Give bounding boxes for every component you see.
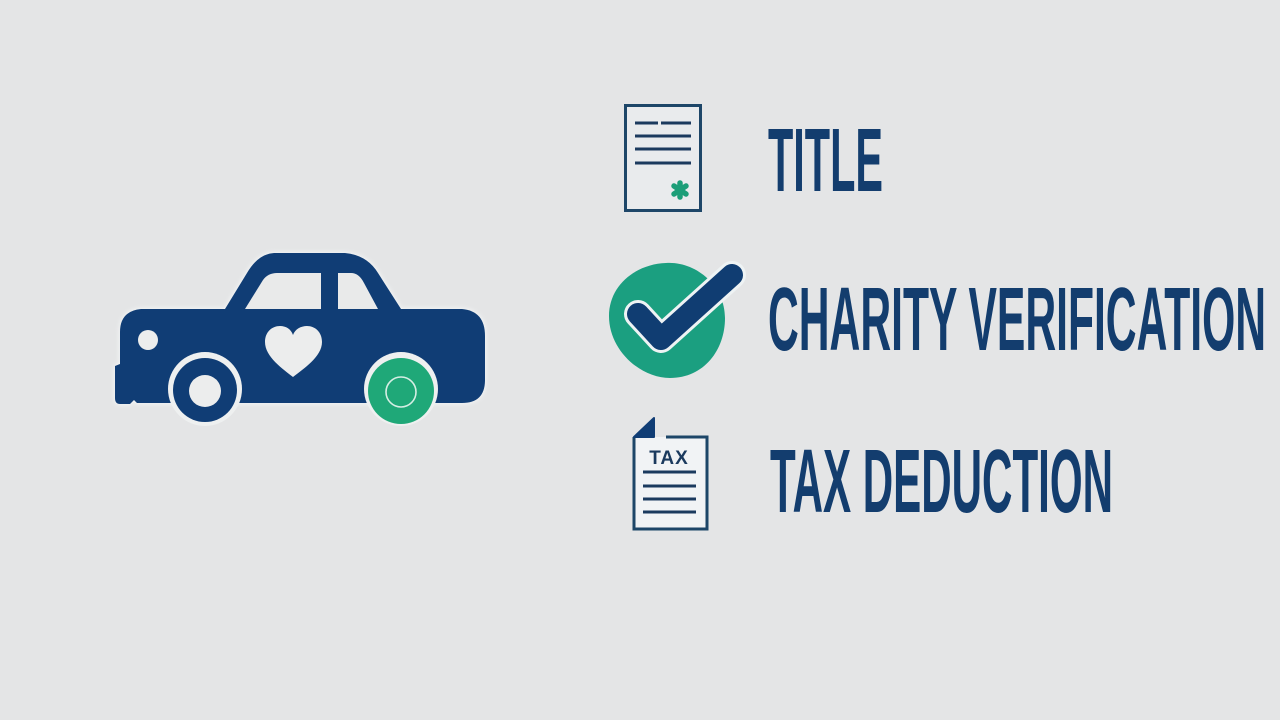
icon: car with heart xyxy=(115,253,485,426)
infographic canvas: TITLE xyxy=(768,111,883,211)
front wheel xyxy=(364,352,438,426)
car body xyxy=(115,253,485,404)
tax label: TAX xyxy=(649,448,689,469)
rear wheel xyxy=(168,352,242,426)
icon: tax document xyxy=(634,418,707,529)
green seal xyxy=(674,183,686,197)
icon: title document xyxy=(626,106,700,210)
icon: verification check badge xyxy=(609,263,732,378)
headlight xyxy=(138,330,158,350)
tax lines xyxy=(643,472,696,512)
heart xyxy=(265,326,322,377)
folded corner xyxy=(634,418,654,437)
car windows xyxy=(245,273,378,309)
document lines xyxy=(635,123,691,163)
